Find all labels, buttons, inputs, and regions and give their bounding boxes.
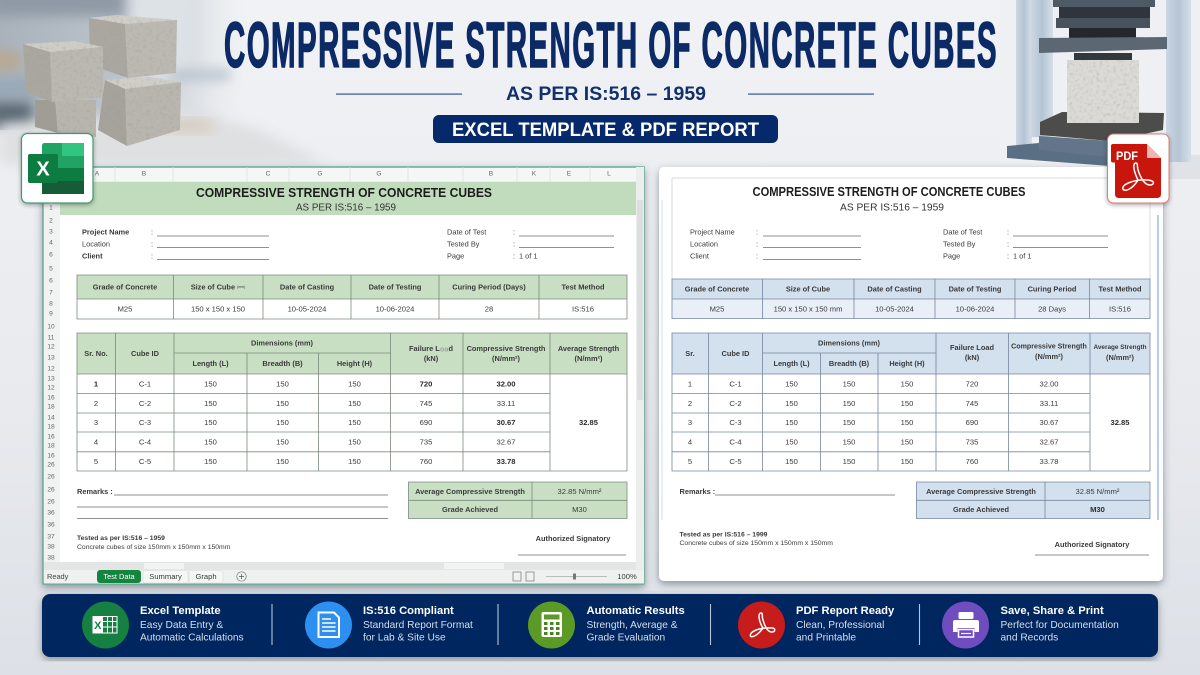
pdf project info — [690, 228, 1108, 260]
row number gutter: 18 — [47, 442, 55, 450]
column letter header: G — [317, 170, 323, 178]
row number gutter: 12 — [47, 344, 55, 350]
row number gutter: 3 — [49, 228, 53, 236]
pdf results table: Failure Load — [950, 343, 994, 352]
excel results table: 4 — [94, 438, 98, 446]
row number gutter: 12 — [47, 366, 55, 372]
row number gutter: 16 — [47, 452, 55, 460]
excel test details table: 10-05-2024 — [288, 304, 326, 314]
pdf project info: Page — [943, 252, 960, 260]
pdf results table: (N/mm²) — [1106, 353, 1134, 362]
excel results table: 735 — [420, 438, 432, 446]
pdf results table: 150 — [785, 418, 798, 427]
excel sheet title band: AS PER IS:516 – 1959 — [296, 202, 396, 214]
pdf results table: 150 — [843, 380, 855, 388]
excel test details table — [77, 275, 627, 319]
pdf test details table: 10-06-2024 — [956, 304, 994, 314]
banner pill — [433, 115, 778, 143]
row number gutter: 37 — [47, 534, 55, 540]
pdf results table: 150 — [901, 380, 913, 388]
excel footnotes and signature: Tested as per IS:516 – 1959 — [77, 535, 165, 542]
pdf test details table — [672, 279, 1150, 318]
pdf summary table: Grade Achieved — [953, 505, 1009, 514]
row number gutter: 38 — [47, 544, 55, 550]
column letter header: A — [95, 170, 100, 178]
feature: automatic results: Automatic Results — [586, 605, 685, 617]
project info fields: Tested By — [447, 240, 480, 248]
pdf results table: 150 — [901, 438, 913, 446]
excel results table: 150 — [204, 380, 217, 388]
excel results table: 33.11 — [497, 399, 515, 408]
pdf test details table: 150 x 150 x 150 mm — [774, 304, 842, 314]
pdf results table: 760 — [966, 457, 978, 466]
pdf results table: 32.67 — [1039, 438, 1059, 446]
pdf remarks: Remarks : — [680, 487, 715, 496]
pdf results table: Breadth (B) — [829, 359, 870, 368]
excel results table: 150 — [204, 457, 217, 466]
photo: compression testing machine — [1000, 0, 1200, 179]
excel results table: 150 — [204, 399, 217, 408]
pdf results table: 150 — [843, 438, 855, 446]
row number gutter: 5 — [49, 266, 53, 272]
excel test details table: Curing Period (Days) — [452, 282, 526, 292]
pdf results table: Length (L) — [773, 359, 810, 368]
footer feature bar — [42, 594, 1158, 657]
pdf project info: Date of Test — [943, 228, 982, 236]
pdf results table: 150 — [901, 418, 913, 427]
pdf heading: AS PER IS:516 – 1959 — [840, 202, 944, 214]
pdf results table: 150 — [785, 399, 798, 408]
pdf results table: Compressive Strength — [1011, 342, 1087, 350]
row number gutter: 10 — [47, 324, 55, 330]
pdf results table: 150 — [843, 399, 855, 408]
excel results table: C-3 — [139, 418, 151, 427]
pdf results table: 33.78 — [1039, 457, 1059, 466]
excel results table: C-5 — [139, 457, 151, 466]
excel results table: 745 — [420, 399, 432, 408]
project info fields: Page — [447, 252, 464, 260]
feature: automatic results — [528, 602, 685, 648]
excel results table: Average Strength — [558, 344, 620, 353]
feature: pdf report ready: PDF Report Ready — [796, 605, 895, 617]
excel results table: (kN) — [424, 354, 439, 363]
feature: excel template — [82, 602, 244, 648]
pdf results table: 150 — [843, 418, 855, 427]
row number gutter: 8 — [49, 300, 53, 308]
cube: lower back — [35, 100, 96, 137]
pdf results table: (N/mm²) — [1035, 352, 1063, 361]
excel results table: Sr. No. — [84, 349, 108, 358]
excel results table: 150 — [348, 457, 361, 466]
icon: pdf badge — [1108, 134, 1169, 203]
excel remarks — [77, 487, 388, 518]
column letter header: K — [532, 170, 537, 178]
icon: excel badge — [22, 134, 93, 203]
project info fields: : — [151, 252, 153, 260]
excel summary table: Average Compressive Strength — [415, 487, 525, 496]
excel results table: 1 — [94, 380, 99, 388]
project info fields: : — [513, 240, 515, 248]
excel results table: 150 — [204, 418, 217, 427]
excel results table: Height (H) — [337, 359, 373, 368]
pdf project info: : — [1007, 252, 1009, 260]
excel results table: 760 — [420, 457, 432, 466]
excel footnotes and signature — [77, 534, 626, 555]
excel test details table: Test Method — [562, 282, 605, 292]
excel results table: 150 — [204, 438, 217, 446]
cube: left — [23, 41, 103, 102]
pdf test details table: IS:516 — [1109, 304, 1131, 314]
excel test details table: Size of Cube (mm) — [191, 282, 245, 292]
panel: pdf report — [659, 167, 1163, 581]
row number gutter: 6 — [49, 278, 53, 284]
feature: is 516 compliant: Standard Report Format — [363, 620, 473, 631]
pdf test details table: Size of Cube — [786, 284, 830, 294]
excel results table: (N/mm²) — [575, 354, 603, 363]
row number gutter: 26 — [47, 498, 55, 506]
pdf project info: 1 of 1 — [1013, 252, 1032, 260]
pdf results table: Cube ID — [722, 349, 750, 358]
excel results table: C-1 — [139, 380, 151, 388]
column letter header: B — [489, 170, 494, 178]
pdf results table: 150 — [785, 380, 798, 388]
pdf results table: 720 — [966, 380, 978, 388]
feature: excel template: Excel Template — [140, 605, 221, 617]
row number gutter: 13 — [47, 376, 55, 382]
pdf results table: 150 — [901, 457, 913, 466]
excel results table: 720 — [420, 380, 432, 388]
feature: pdf report ready: and Printable — [796, 632, 856, 644]
banner pill: EXCEL TEMPLATE & PDF REPORT — [452, 120, 759, 141]
row number gutter: 12 — [47, 384, 55, 392]
cube: front right — [98, 77, 181, 146]
row number gutter: 2 — [49, 218, 53, 224]
excel test details table: Date of Casting — [280, 282, 335, 292]
pdf test details table: Test Method — [1099, 284, 1142, 294]
excel results table: 30.67 — [496, 418, 516, 427]
column letter header: E — [567, 170, 572, 178]
excel results table: 2 — [94, 399, 98, 408]
pdf results table: C-3 — [729, 418, 742, 427]
row number gutter — [44, 182, 60, 562]
row number gutter: 9 — [49, 310, 53, 318]
excel results table: 150 — [348, 399, 361, 408]
pdf footnotes and signature: Concrete cubes of size 150mm x 150mm x 150mm — [680, 540, 833, 547]
project info fields: : — [151, 228, 153, 236]
pdf summary table — [916, 482, 1150, 518]
pdf results table: Sr. — [685, 349, 695, 358]
pdf results table: 150 — [785, 438, 798, 446]
feature: excel template: X — [94, 620, 102, 632]
row number gutter: 1 — [49, 204, 53, 212]
excel results table: 150 — [276, 399, 289, 408]
excel status bar and sheet tabs: Graph — [195, 572, 217, 581]
pdf results table: Average Strength — [1093, 344, 1147, 351]
pdf results table: 30.67 — [1039, 418, 1059, 427]
feature: save share print — [942, 602, 1119, 648]
pdf results table: 150 — [901, 399, 913, 408]
pdf project info: Tested By — [943, 240, 976, 248]
feature: is 516 compliant: IS:516 Compliant — [363, 605, 454, 617]
pdf results table: 735 — [966, 438, 978, 446]
pdf heading — [752, 185, 1026, 214]
feature: automatic results: Strength, Average & — [586, 620, 678, 631]
feature: automatic results: Grade Evaluation — [586, 632, 665, 644]
pdf test details table: Date of Testing — [949, 284, 1002, 294]
panel: excel worksheet — [43, 167, 644, 584]
pdf project info: Client — [690, 252, 709, 260]
excel test details table: M25 — [118, 304, 132, 314]
row number gutter: 16 — [47, 394, 55, 402]
pdf project info: : — [1007, 228, 1009, 236]
row number gutter: 13 — [47, 354, 55, 362]
excel remarks: Remarks : — [77, 487, 113, 496]
excel results table: 150 — [276, 380, 289, 388]
row number gutter: 7 — [49, 290, 53, 296]
excel results table: Length (L) — [192, 359, 229, 368]
pdf footnotes and signature: Tested as per IS:516 – 1999 — [680, 532, 768, 538]
excel results table: Dimensions (mm) — [251, 338, 314, 348]
row number gutter: 18 — [47, 404, 55, 410]
excel results table: 150 — [276, 457, 289, 466]
row number gutter: 36 — [47, 510, 55, 516]
pdf summary table: M30 — [1090, 505, 1105, 514]
pdf test details table: Grade of Concrete — [685, 284, 749, 294]
pdf results table: 5 — [688, 457, 692, 466]
pdf results table: 2 — [688, 399, 692, 408]
column letter header: L — [607, 170, 611, 178]
feature: pdf report ready — [738, 602, 895, 648]
pdf footnotes and signature: Authorized Signatory — [1055, 540, 1130, 549]
feature: is 516 compliant: for Lab & Site Use — [363, 632, 446, 644]
excel summary table: M30 — [572, 505, 587, 514]
feature: is 516 compliant — [305, 602, 473, 648]
excel summary table: 32.85 N/mm² — [558, 487, 602, 496]
pdf summary table: Average Compressive Strength — [926, 487, 1036, 496]
excel status bar and sheet tabs: Test Data — [103, 572, 135, 581]
column letter header: B — [142, 170, 147, 178]
pdf footnotes and signature — [680, 532, 1149, 555]
pdf results table: C-1 — [729, 380, 742, 388]
excel results table: 32.67 — [496, 438, 516, 446]
pdf results table: C-2 — [729, 399, 742, 408]
pdf project info: : — [756, 252, 758, 260]
excel results table: 5 — [94, 457, 98, 466]
pdf test details table: Curing Period — [1028, 284, 1077, 294]
row number gutter: 11 — [48, 334, 55, 342]
excel results table: Failure Load — [409, 344, 453, 353]
pdf results table: 1 — [688, 380, 692, 388]
excel sheet title band — [60, 182, 636, 215]
pdf results table — [672, 333, 1150, 471]
row number gutter: 4 — [49, 240, 53, 246]
excel results table: 150 — [276, 438, 289, 446]
excel results table: C-4 — [139, 438, 151, 446]
excel results table: 690 — [420, 418, 432, 427]
row number gutter: 16 — [47, 434, 55, 440]
excel results table — [77, 333, 627, 471]
excel summary table — [408, 482, 627, 518]
excel test details table: IS:516 — [572, 304, 594, 314]
pdf test details table: 28 Days — [1038, 304, 1066, 314]
feature: save share print: Perfect for Documentation — [1000, 620, 1119, 631]
project info fields: 1 of 1 — [519, 252, 538, 260]
icon: excel badge: X — [36, 158, 50, 180]
project info fields: Location — [82, 240, 110, 248]
excel status bar and sheet tabs: Summary — [149, 572, 182, 581]
excel results table: 32.85 — [579, 418, 599, 427]
excel results table: 150 — [276, 418, 289, 427]
excel results table: (N/mm²) — [492, 354, 520, 363]
project info fields — [82, 228, 614, 260]
column letter header: G — [376, 170, 382, 178]
excel results table: 32.00 — [496, 380, 516, 388]
project info fields: Client — [82, 252, 103, 260]
excel test details table: 28 — [485, 304, 493, 314]
feature: pdf report ready: Clean, Professional — [796, 620, 884, 631]
row number gutter: 18 — [47, 424, 55, 430]
pdf heading: COMPRESSIVE STRENGTH OF CONCRETE CUBES — [752, 185, 1026, 199]
pdf results table: Height (H) — [889, 359, 925, 368]
pdf test details table: Date of Casting — [867, 284, 922, 294]
pdf results table: 33.11 — [1040, 399, 1058, 408]
pdf test details table: 10-05-2024 — [875, 304, 914, 314]
project info fields: Date of Test — [447, 228, 486, 236]
excel status bar and sheet tabs: 100% — [617, 572, 637, 581]
excel footnotes and signature: Concrete cubes of size 150mm x 150mm x 150mm — [77, 544, 231, 551]
project info fields: : — [513, 252, 515, 260]
photo: blurred lab shelves and concrete cubes — [0, 0, 330, 165]
excel sheet title band: COMPRESSIVE STRENGTH OF CONCRETE CUBES — [196, 185, 492, 200]
pdf results table: C-4 — [729, 438, 742, 446]
row number gutter: 26 — [47, 462, 55, 468]
pdf results table: (kN) — [965, 353, 980, 362]
project info fields: Project Name — [82, 228, 129, 236]
excel test details table: 10-06-2024 — [376, 304, 414, 314]
excel results table: 3 — [94, 418, 98, 427]
cube: top — [89, 15, 177, 78]
icon: pdf badge: PDF — [1116, 151, 1138, 163]
pdf project info: : — [1007, 240, 1009, 248]
feature: excel template: Easy Data Entry & — [140, 620, 223, 631]
row number gutter: 38 — [47, 554, 55, 562]
project info fields: : — [513, 228, 515, 236]
excel results table: 33.78 — [496, 457, 516, 466]
excel test details table: 150 x 150 x 150 — [191, 304, 245, 314]
pdf results table: 150 — [785, 457, 798, 466]
excel results table: C-2 — [139, 399, 151, 408]
excel results table: 150 — [348, 418, 361, 427]
excel results table: 150 — [348, 380, 361, 388]
pdf results table: C-5 — [729, 457, 742, 466]
feature: excel template: Automatic Calculations — [140, 632, 244, 644]
excel results table: Compressive Strength — [467, 344, 546, 353]
excel results table: Breadth (B) — [262, 359, 303, 368]
subtitle with side rules: AS PER IS:516 – 1959 — [506, 84, 706, 105]
excel summary table: Grade Achieved — [442, 505, 498, 514]
excel results table: 150 — [348, 438, 361, 446]
row number gutter: 14 — [47, 414, 55, 422]
pdf summary table: 32.85 N/mm² — [1076, 487, 1120, 496]
pdf project info: : — [756, 228, 758, 236]
excel footnotes and signature: Authorized Signatory — [536, 534, 611, 543]
row number gutter: 26 — [47, 486, 55, 494]
pdf results table: 3 — [688, 418, 692, 427]
project info fields: : — [151, 240, 153, 248]
excel test details table: Grade of Concrete — [93, 282, 157, 292]
feature: save share print: Save, Share & Print — [1000, 605, 1104, 617]
excel test details table: Date of Testing — [369, 282, 422, 292]
pdf project info: Project Name — [690, 228, 735, 236]
pdf results table: 745 — [966, 399, 978, 408]
excel status bar and sheet tabs: Ready — [47, 572, 69, 581]
excel results table: Cube ID — [131, 349, 160, 358]
pdf results table: 32.85 — [1110, 418, 1130, 427]
pdf results table: 150 — [843, 457, 855, 466]
pdf results table: 690 — [966, 418, 978, 427]
row number gutter: 26 — [47, 474, 55, 480]
pdf results table: 32.00 — [1039, 380, 1059, 388]
column letter header: C — [266, 170, 271, 178]
pdf project info: Location — [690, 240, 718, 248]
excel status bar and sheet tabs — [44, 562, 644, 584]
vertical scrollbar — [636, 167, 644, 570]
column letter header — [60, 167, 636, 182]
feature: save share print: and Records — [1000, 632, 1058, 644]
row number gutter: 6 — [49, 252, 53, 258]
pdf project info: : — [756, 240, 758, 248]
pdf results table: Dimensions (mm) — [818, 338, 881, 348]
row number gutter: 36 — [47, 522, 55, 528]
pdf test details table: M25 — [710, 304, 724, 314]
pdf results table: 4 — [688, 438, 692, 446]
